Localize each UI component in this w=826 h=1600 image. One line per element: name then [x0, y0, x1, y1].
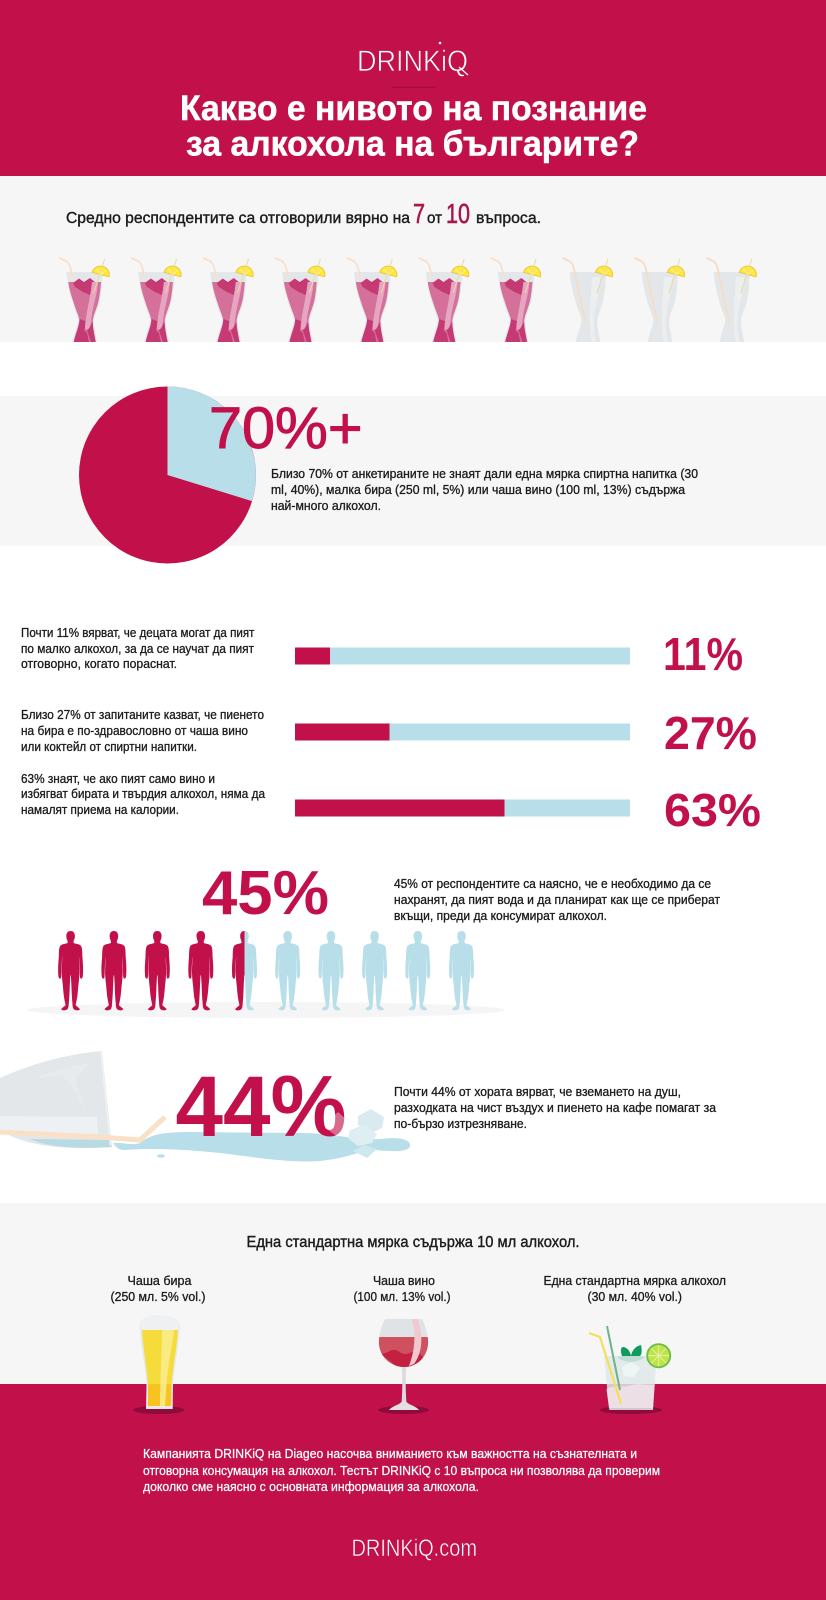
text block: 44 percent: по-бързо изтрезняване.	[394, 1116, 527, 1131]
text block: campaign: отговорна консумация на алкохол. Тестът DRINKiQ с 10 въпроса ни позволява да проверим	[143, 1463, 660, 1478]
icon: beer glass	[133, 1315, 184, 1414]
text block: campaign: Кампанията DRINKiQ на Diageo насочва вниманието към важността на съзнателната и	[143, 1446, 637, 1461]
text block: 45 percent	[394, 876, 720, 923]
text block: 70 percent	[271, 466, 698, 513]
panel: average score	[0, 176, 826, 342]
text block: 63 percent: 63% знаят, че ако пият само вино и	[21, 771, 215, 786]
section: 44 percent	[0, 1051, 717, 1161]
text block: 70 percent: най-много алкохол.	[271, 498, 381, 513]
heading: average score	[66, 198, 541, 229]
text block: 27 percent: Близо 27% от запитаните казват, че пиенето	[21, 707, 264, 722]
icon: wine glass	[378, 1319, 429, 1414]
lime	[646, 1343, 671, 1368]
text block: campaign: доколко сме наясно с основната информация за алкохола.	[143, 1479, 479, 1494]
heading: average score: въпроса.	[476, 210, 541, 227]
label: spirit: (30 мл. 40% vol.)	[588, 1289, 682, 1304]
text block: 27 percent	[21, 707, 264, 754]
text block: 45 percent: вкъщи, преди да консумират алкохол.	[394, 908, 607, 923]
illustration: ice cubes	[328, 1109, 384, 1158]
straws	[607, 1326, 620, 1390]
stat: 27%: 27%	[664, 707, 757, 759]
illustration: spilled water	[113, 1132, 410, 1161]
row: 27 percent	[21, 707, 757, 759]
text block: 70 percent: ml, 40%), малка бира (250 ml, 5%) или чаша вино (100 ml, 13%) съдържа	[271, 482, 686, 497]
title: Какво е нивото на познание	[180, 89, 647, 128]
text block: 11 percent	[21, 625, 255, 671]
ground shadow	[27, 1002, 505, 1018]
title	[180, 89, 647, 164]
text block: 11 percent: по малко алкохол, за да се научат да пият	[21, 641, 254, 656]
title: за алкохола на българите?	[186, 124, 639, 164]
icon row: 7 of 10 glasses	[60, 258, 756, 342]
label: wine: (100 мл. 13% vol.)	[354, 1289, 450, 1304]
row: 63 percent	[21, 771, 761, 836]
illustration: tipped glass	[0, 1051, 165, 1148]
text block: 45 percent: нахранят, да пият вода и да планират как ще се приберат	[394, 892, 720, 907]
stat: 70%+: 70%+	[209, 396, 362, 461]
text block: 44 percent: разходката на чист въздух и пиенето на кафе помагат за	[394, 1100, 717, 1115]
heading: average score: Средно респондентите са отговорили вярно на	[66, 210, 410, 227]
text block: 11 percent: Почти 11% вярват, че децата могат да пият	[21, 625, 255, 640]
stat: 11%: 11%	[663, 628, 743, 680]
row: 11 percent	[21, 625, 743, 680]
stat: 45%: 45%	[202, 859, 329, 928]
text block: 70 percent: Близо 70% от анкетираните не знаят дали една мярка спиртна напитка (30	[271, 466, 698, 481]
label: beer	[110, 1273, 206, 1304]
mint	[617, 1345, 645, 1362]
bar: 27 percent	[295, 724, 630, 740]
label: spirit	[544, 1273, 726, 1304]
icon: cocktail glass	[589, 1326, 671, 1414]
panel: header	[0, 0, 826, 176]
panel: 70 percent	[0, 386, 826, 564]
logo: DRINKiQ: DRINKiQ	[357, 45, 468, 78]
straw	[0, 1117, 165, 1140]
label: wine: Чаша вино	[373, 1273, 435, 1288]
text block: 63 percent: избягват бирата и твърдия алкохол, няма да	[21, 786, 266, 801]
text block: 27 percent: на бира е по-здравословно от чаша вино	[21, 723, 248, 738]
text block: 45 percent: 45% от респондентите са наясно, че е необходимо да се	[394, 876, 711, 891]
text block: 63 percent	[21, 771, 266, 817]
heading: standard drink: Една стандартна мярка съдържа 10 мл алкохол.	[246, 1234, 580, 1251]
text block: 11 percent: отговорно, когато пораснат.	[21, 656, 177, 671]
pie chart	[79, 386, 256, 564]
text block: 44 percent	[394, 1084, 717, 1131]
label: beer: Чаша бира	[128, 1273, 192, 1288]
logo: DRINKiQ.com: DRINKiQ.com	[352, 1535, 477, 1562]
stat: 63%: 63%	[664, 784, 761, 836]
panel: standard drink	[0, 1203, 826, 1384]
text block: 27 percent: или коктейл от спиртни напитки.	[21, 739, 197, 754]
section: 45 percent	[27, 859, 720, 1018]
stat: 44%: 44%	[176, 1059, 346, 1155]
heading: average score: 7	[413, 198, 425, 229]
panel: footer	[0, 1384, 826, 1600]
bar: 63 percent	[295, 800, 630, 816]
text block: campaign	[143, 1446, 660, 1494]
label: spirit: Една стандартна мярка алкохол	[544, 1273, 726, 1288]
text block: 44 percent: Почти 44% от хората вярват, че вземането на душ,	[394, 1084, 681, 1099]
label: beer: (250 мл. 5% vol.)	[110, 1289, 206, 1304]
heading: average score: от	[427, 210, 442, 227]
heading: average score: 10	[446, 198, 470, 229]
text block: 63 percent: намалят приема на калории.	[21, 802, 179, 817]
bar: 11 percent	[295, 648, 630, 664]
label: wine	[354, 1273, 450, 1304]
icon row: people	[58, 931, 474, 1010]
